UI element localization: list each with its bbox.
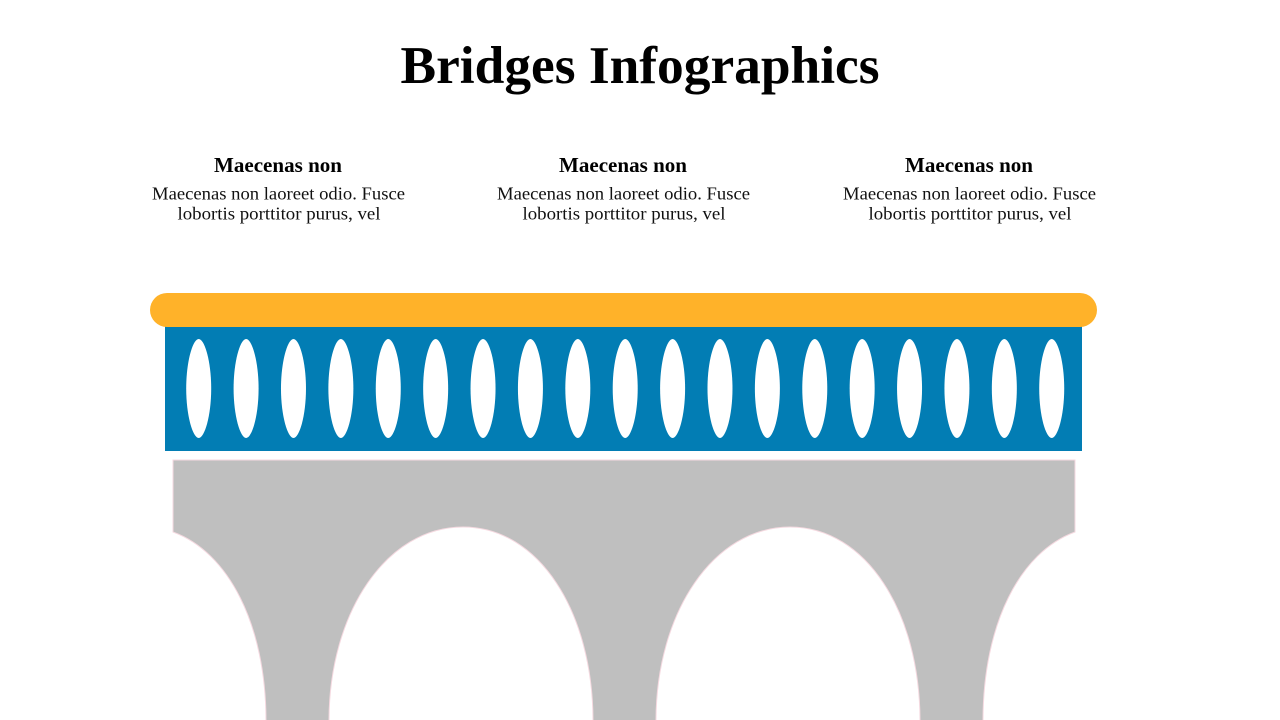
body text: column 2: Maecenas non laoreet odio. Fusce	[497, 184, 750, 204]
body text: column 1: Maecenas non laoreet odio. Fusce	[152, 184, 405, 204]
oval openings	[186, 339, 1064, 438]
text block: column 1	[152, 153, 405, 224]
title: Bridges Infographics	[400, 37, 880, 95]
bridge arches	[173, 460, 1075, 720]
text block: column 3	[843, 153, 1096, 224]
heading: column 2: Maecenas non	[559, 153, 687, 177]
text block: column 2	[497, 153, 750, 224]
bridge deck	[150, 293, 1097, 327]
body text: column 2: lobortis porttitor purus, vel	[522, 204, 726, 224]
body text: column 1: lobortis porttitor purus, vel	[178, 204, 380, 224]
body text: column 3: lobortis porttitor purus, vel	[868, 204, 1072, 224]
body text: column 3: Maecenas non laoreet odio. Fusce	[843, 184, 1096, 204]
railing background	[165, 326, 1082, 451]
heading: column 3: Maecenas non	[905, 153, 1033, 177]
bridge railing panel with oval openings	[165, 326, 1082, 451]
heading: column 1: Maecenas non	[214, 153, 342, 177]
